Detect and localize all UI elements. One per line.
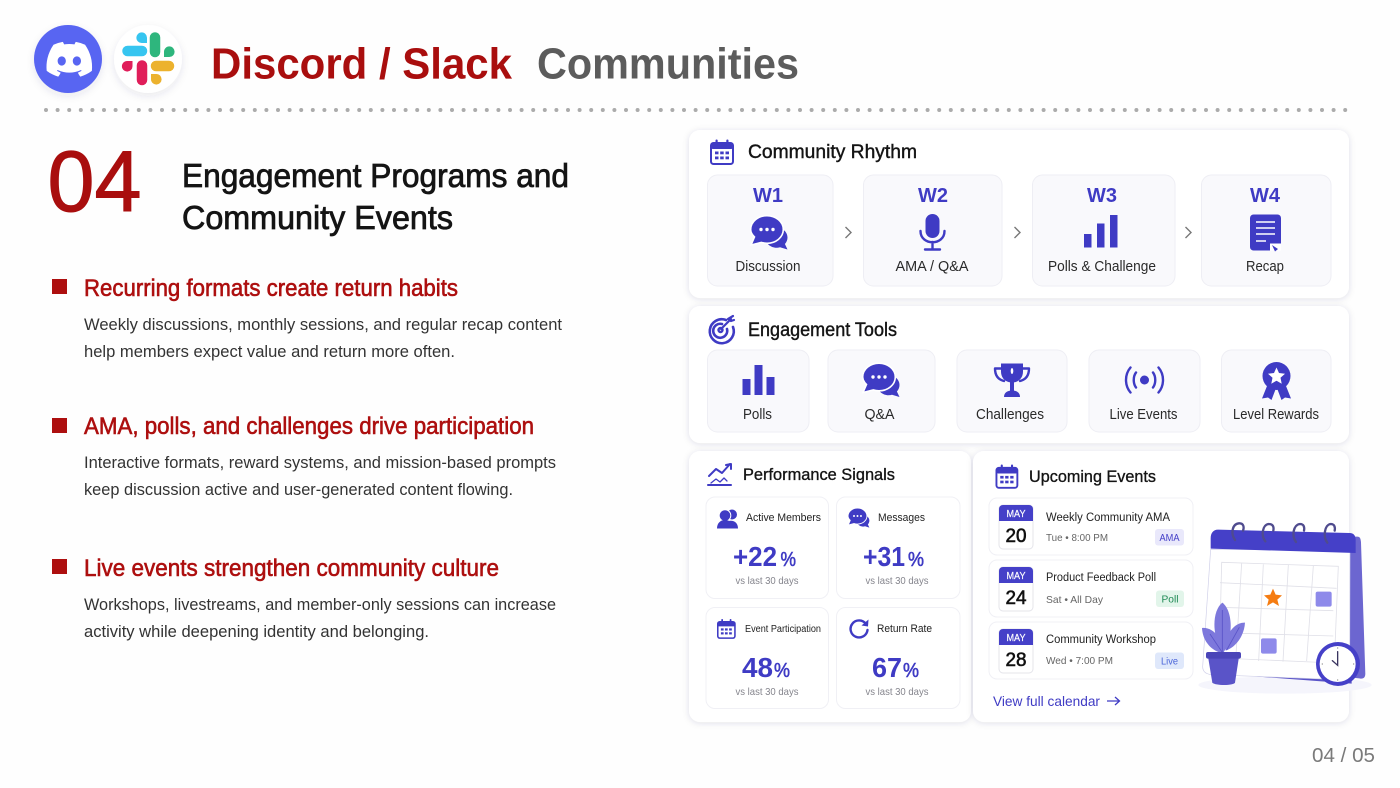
event: community workshop: Live — [1161, 656, 1178, 668]
card: live events: Live Events — [1110, 407, 1178, 423]
metric: active members: +22 — [733, 541, 777, 572]
card: W3 polls — [1032, 175, 1175, 286]
point 1: recurring formats: Recurring formats create return habits — [84, 275, 458, 302]
card: live events — [1089, 350, 1200, 432]
metric: return rate: % — [903, 660, 919, 682]
point 3: live events: Live events strengthen community culture — [84, 555, 499, 582]
card: level rewards: Level Rewards — [1233, 407, 1319, 423]
heading: community rhythm: Community Rhythm — [748, 142, 917, 163]
link: view full calendar: View full calendar — [993, 693, 1100, 709]
card: W3 polls: W3 — [1087, 185, 1117, 207]
metric: return rate: Return Rate — [877, 623, 932, 635]
metric: messages: Messages — [878, 512, 925, 524]
metric: return rate: vs last 30 days — [866, 686, 928, 698]
section heading: Engagement Programs and — [182, 158, 569, 195]
card: W3 polls: Polls & Challenge — [1048, 259, 1156, 275]
metric: active members — [706, 497, 828, 598]
card: polls — [708, 350, 809, 432]
metric: active members: vs last 30 days — [736, 575, 798, 587]
point 3: live events: activity while deepening identity and belonging. — [84, 622, 429, 641]
metric: event participation: vs last 30 days — [736, 686, 798, 698]
page number: 04 / 05 — [1312, 745, 1375, 767]
icon: Discord logo — [34, 25, 102, 93]
event: weekly community AMA: Tue • 8:00 PM — [1046, 532, 1108, 544]
event: community workshop: Wed • 7:00 PM — [1046, 655, 1113, 667]
point 2: AMA, polls, challenges: keep discussion active and user-generated content flowing. — [84, 480, 513, 499]
event: weekly community AMA: Weekly Community AMA — [1046, 512, 1170, 524]
card: W2 AMA: W2 — [918, 185, 948, 207]
section number: 04 — [48, 134, 142, 230]
card: polls: Polls — [743, 407, 772, 423]
point 1: recurring formats — [52, 275, 562, 361]
metric: active members: % — [780, 549, 796, 571]
arrow — [1014, 227, 1020, 238]
heading: engagement tools: Engagement Tools — [748, 320, 897, 341]
event: weekly community AMA: AMA — [1160, 533, 1180, 544]
illustration: desk calendar with plant and clock — [1198, 523, 1372, 694]
event: community workshop — [989, 622, 1193, 679]
section heading: Community Events — [182, 200, 453, 237]
icon: calendar — [996, 464, 1017, 488]
panel: community rhythm — [689, 130, 1349, 298]
metric: messages: vs last 30 days — [866, 575, 928, 587]
card: W2 AMA: AMA / Q&A — [896, 259, 969, 275]
card: W4 recap: W4 — [1250, 185, 1281, 207]
arrow — [1186, 227, 1191, 238]
icon: Slack logo — [114, 25, 182, 93]
panel: upcoming events — [973, 451, 1349, 722]
event: community workshop: Community Workshop — [1046, 634, 1156, 646]
title: Communities — [537, 40, 799, 88]
point 3: live events — [52, 555, 556, 641]
card: W1 discussion: Discussion — [736, 259, 800, 275]
arrow — [846, 227, 851, 238]
card: Q&A — [828, 350, 935, 432]
metric: messages — [836, 497, 960, 598]
card: challenges — [957, 350, 1067, 432]
event: community workshop: 28 — [1006, 650, 1026, 671]
card: W2 AMA — [864, 175, 1002, 286]
card: W1 discussion — [708, 175, 833, 286]
event: weekly community AMA — [989, 498, 1193, 555]
card: W4 recap — [1202, 175, 1331, 286]
point 2: AMA, polls, challenges: AMA, polls, and challenges drive participation — [84, 413, 534, 440]
event: product feedback poll: Poll — [1162, 594, 1178, 606]
panel: engagement tools — [689, 306, 1349, 443]
heading: performance signals: Performance Signals — [743, 465, 895, 484]
icon: target — [710, 316, 734, 343]
heading: upcoming events: Upcoming Events — [1029, 467, 1156, 486]
metric: return rate: 67 — [872, 652, 902, 683]
point 2: AMA, polls, challenges — [52, 413, 556, 499]
panel: performance signals — [689, 451, 971, 722]
section heading — [182, 158, 569, 237]
metric: event participation — [706, 608, 828, 708]
card: challenges: Challenges — [976, 407, 1044, 423]
icon: trend chart — [708, 464, 731, 485]
metric: event participation: 48 — [742, 652, 773, 683]
title: Discord / Slack — [211, 40, 512, 88]
title — [211, 40, 799, 88]
event: weekly community AMA: MAY — [1006, 509, 1026, 520]
metric: event participation: % — [774, 660, 790, 682]
icon: calendar — [711, 140, 733, 164]
card: Q&A: Q&A — [864, 407, 895, 423]
card: level rewards — [1222, 350, 1331, 432]
point 1: recurring formats: help members expect value and return more often. — [84, 342, 455, 361]
event: community workshop: MAY — [1006, 633, 1026, 644]
metric: active members: Active Members — [746, 512, 821, 524]
event: product feedback poll: MAY — [1006, 571, 1026, 582]
point 3: live events: Workshops, livestreams, and member-only sessions can increase — [84, 595, 556, 614]
metric: return rate — [836, 608, 960, 708]
event: product feedback poll: Product Feedback Poll — [1046, 572, 1156, 584]
event: product feedback poll — [989, 560, 1193, 617]
card: W4 recap: Recap — [1246, 259, 1284, 275]
event: product feedback poll: 24 — [1006, 588, 1027, 609]
metric: messages: +31 — [863, 541, 905, 572]
metric: messages: % — [908, 549, 924, 571]
event: product feedback poll: Sat • All Day — [1046, 594, 1104, 606]
event: weekly community AMA: 20 — [1006, 526, 1026, 547]
card: W1 discussion: W1 — [753, 185, 783, 207]
point 2: AMA, polls, challenges: Interactive formats, reward systems, and mission-based prompts — [84, 453, 556, 472]
metric: event participation: Event Participation — [745, 624, 821, 635]
point 1: recurring formats: Weekly discussions, monthly sessions, and regular recap content — [84, 315, 562, 334]
